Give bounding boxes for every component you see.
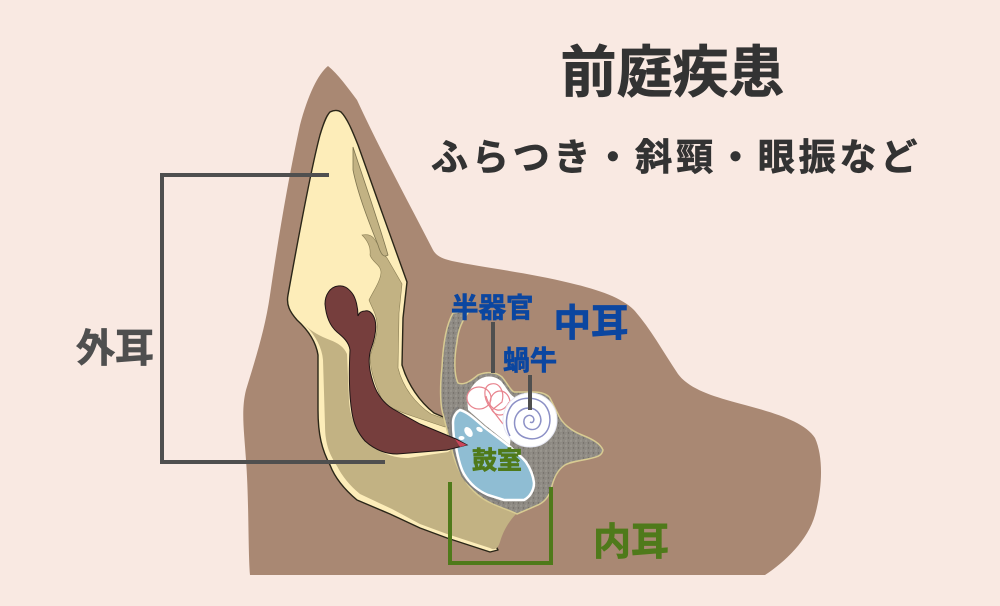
middle ear bone	[441, 310, 603, 514]
cartilage	[287, 110, 498, 552]
outer ear canal and cartilage	[287, 110, 517, 552]
subtitle: ふらつき・斜頸・眼振など	[431, 137, 921, 178]
bubbles in tympanic cavity	[458, 425, 484, 440]
vestibule white	[467, 377, 514, 445]
cochlea	[503, 393, 557, 447]
semicircular canals leader line	[491, 322, 495, 373]
label: tympanic cavity: 鼓室	[472, 447, 522, 475]
inner ear bracket	[450, 482, 551, 563]
cochlea leader line	[528, 375, 532, 410]
label: inner ear: 内耳	[593, 522, 669, 564]
head silhouette	[243, 66, 821, 575]
eardrum tip	[455, 439, 467, 447]
outer ear bracket	[162, 175, 385, 462]
tan tissue upper	[362, 235, 448, 427]
label: middle ear: 中耳	[554, 302, 628, 344]
external ear canal lumen	[325, 286, 467, 454]
label: semicircular canals: 半器官	[451, 292, 534, 323]
label: outer ear: 外耳	[76, 328, 154, 371]
narrow cartilage strip	[353, 147, 388, 256]
tympanic cavity	[453, 410, 534, 500]
semicircular canals	[467, 384, 510, 424]
label: cochlea: 蝸牛	[503, 346, 557, 376]
tan tissue lower	[305, 325, 517, 549]
title: 前庭疾患	[560, 41, 784, 104]
